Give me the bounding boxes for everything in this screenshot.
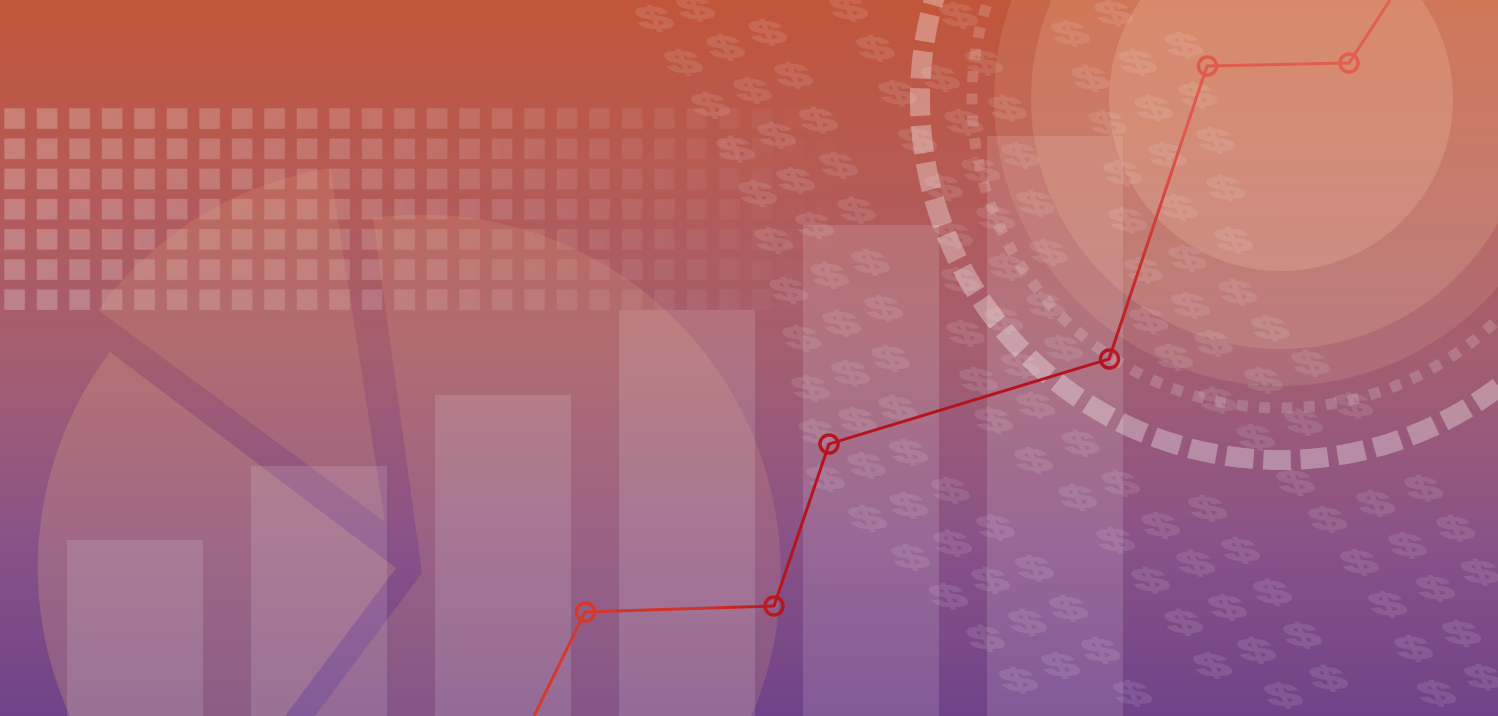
bar chart (67, 136, 1123, 716)
dollar sign pattern: $$$$$$$$$$$$$$$$$$$$$$$ (1136, 310, 1498, 711)
dollar sign pattern (612, 0, 1498, 713)
dollar sign pattern: $$$$$$$$$$$$$$$$$$$$$ (810, 0, 1122, 351)
dollar sign pattern: $$$$$$$$$$$$$$$$$$$$$$$ (625, 0, 932, 356)
dollar sign pattern: $$$$$$$$$$$$$$$$$$$$$$$$$ (752, 340, 1157, 711)
pie slice: top left (98, 168, 385, 522)
trend line (534, 0, 1390, 716)
middle circle (1031, 0, 1498, 349)
bar 4 (619, 310, 755, 716)
dollar sign pattern: $$$$$$$$$$$$$$$$$$$$ (1000, 0, 1318, 338)
dashed rings (920, 0, 1498, 460)
inner circle (1109, 0, 1453, 271)
data point markers (576, 54, 1358, 621)
square dot grid (4, 108, 707, 310)
outer dashed ring (920, 0, 1498, 460)
dollar sign pattern: $$$$$$$$$$$$$$$$$$$$$$$ (939, 330, 1360, 713)
bar 2 (251, 466, 387, 716)
concentric target circles (994, 0, 1498, 386)
bar 5 (803, 225, 939, 716)
bar 3 (435, 395, 571, 716)
bar 6 (987, 136, 1123, 716)
rising line chart (534, 0, 1390, 716)
outer circle (994, 0, 1498, 386)
pie slice: large right (315, 215, 781, 716)
bar 1 (67, 540, 203, 716)
pie chart (38, 168, 781, 716)
pie slice: bottom left (38, 352, 396, 716)
inner dotted ring (972, 0, 1498, 408)
